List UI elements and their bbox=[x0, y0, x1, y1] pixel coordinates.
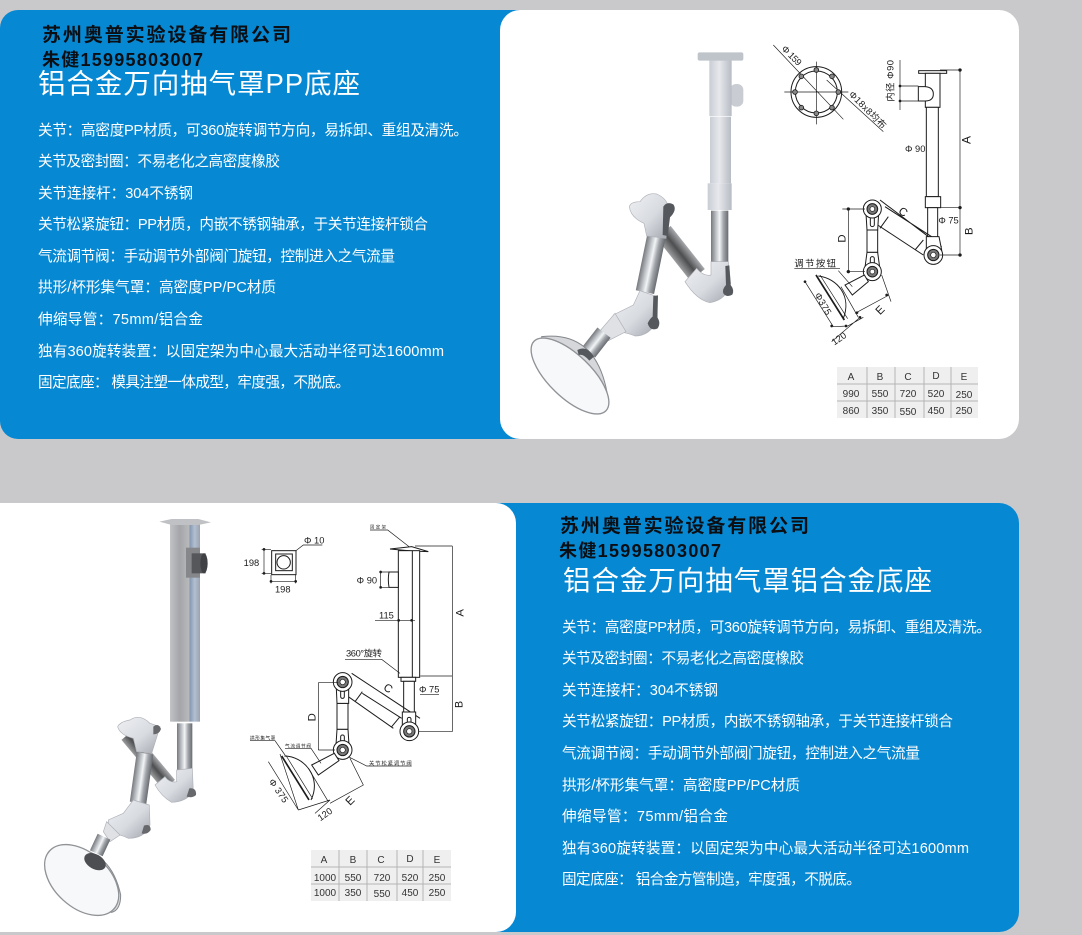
feature list: 伸缩导管：75mm/铝合金 bbox=[562, 808, 728, 825]
dimension table: aluminium base: 250 bbox=[429, 888, 446, 899]
feature list: 关节：高密度PP材质，可360旋转调节方向，易拆卸、重组及清洗。 bbox=[38, 122, 468, 139]
top text block bbox=[38, 23, 468, 391]
dimension lines bbox=[250, 530, 452, 813]
dimension table: aluminium base: 350 bbox=[345, 888, 362, 899]
base plate plan view: 198 bbox=[244, 558, 259, 568]
dimension lines bbox=[804, 60, 962, 342]
dimension table: PP base: 450 bbox=[928, 406, 945, 417]
base plate plan view: Φ 10 bbox=[304, 535, 324, 545]
dimension labels: 气流调节阀 bbox=[285, 742, 311, 749]
feature list: 关节及密封圈：不易老化之高密度橡胶 bbox=[38, 153, 280, 170]
dimension table: aluminium base: 1000 bbox=[314, 888, 337, 899]
dimension table: PP base: 990 bbox=[843, 389, 860, 400]
arm elevation bbox=[282, 547, 428, 800]
dimension table: aluminium base: 1000 bbox=[314, 873, 337, 884]
dimension labels: 调节按钮 bbox=[794, 257, 836, 268]
dimension table: PP base: 550 bbox=[872, 389, 889, 400]
feature list: 关节松紧旋钮：PP材质，内嵌不锈钢轴承，于关节连接杆锁合 bbox=[562, 713, 953, 730]
dimension labels: 固定架 bbox=[370, 524, 387, 531]
bottom text block bbox=[559, 514, 991, 888]
dimension table: PP base: E bbox=[961, 372, 968, 383]
feature list: 关节及密封圈：不易老化之高密度橡胶 bbox=[562, 650, 804, 667]
dimension labels bbox=[250, 524, 467, 823]
product image: extraction arm with PP base bbox=[519, 52, 743, 426]
contact: 朱健15995803007 bbox=[559, 541, 721, 561]
feature list: 伸缩导管：75mm/铝合金 bbox=[38, 311, 203, 328]
dimension labels: 关节松紧调节阀 bbox=[369, 759, 412, 767]
dimension table: aluminium base: C bbox=[377, 855, 385, 866]
dimension table: aluminium base: 520 bbox=[402, 873, 419, 884]
dimension labels: Φ 375 bbox=[267, 777, 290, 805]
dimension table: PP base: B bbox=[877, 372, 884, 383]
panel: bottom white product area bbox=[0, 503, 516, 932]
dimension table: PP base: 520 bbox=[928, 389, 945, 400]
dimension labels: Φ 75 bbox=[419, 684, 439, 694]
dimension table: aluminium base: D bbox=[406, 854, 414, 865]
technical drawing: PP base arm bbox=[773, 44, 975, 347]
dimension table: aluminium base: 550 bbox=[374, 889, 391, 900]
feature list bbox=[562, 619, 991, 888]
dimension labels: D bbox=[836, 234, 848, 243]
feature list: 关节连接杆：304不锈钢 bbox=[562, 682, 718, 699]
feature list: 拱形/杯形集气罩：高密度PP/PC材质 bbox=[562, 777, 800, 794]
feature list bbox=[38, 122, 468, 391]
dimension labels: Φ 90 bbox=[357, 575, 377, 585]
feature list: 气流调节阀：手动调节外部阀门旋钮，控制进入之气流量 bbox=[38, 248, 395, 265]
flange plan view: Φ18x8均布 bbox=[847, 89, 889, 131]
panel: top blue background bbox=[0, 10, 640, 439]
dimension labels: D bbox=[306, 713, 318, 721]
dimension table: aluminium base bbox=[311, 850, 451, 901]
dimension table: aluminium base: A bbox=[321, 855, 328, 866]
product image: extraction arm with aluminium base bbox=[31, 519, 211, 929]
dimension table: PP base: 350 bbox=[872, 406, 889, 417]
feature list: 关节松紧旋钮：PP材质，内嵌不锈钢轴承，于关节连接杆锁合 bbox=[38, 216, 428, 233]
dimension labels: A bbox=[959, 136, 973, 144]
dimension labels: A bbox=[455, 609, 467, 617]
dimension labels: E bbox=[874, 303, 888, 317]
feature list: 固定底座： 模具注塑一体成型，牢度强，不脱底。 bbox=[38, 374, 350, 391]
arm elevation bbox=[816, 71, 947, 320]
dimension labels: E bbox=[344, 794, 358, 808]
feature list: 关节：高密度PP材质，可360旋转调节方向，易拆卸、重组及清洗。 bbox=[562, 619, 991, 636]
dimension labels: 360°旋转 bbox=[346, 647, 382, 658]
dimension labels: Φ375 bbox=[813, 291, 833, 317]
company name: 苏州奥普实验设备有限公司 bbox=[42, 23, 291, 46]
dimension labels: 115 bbox=[379, 610, 394, 620]
dimension table: aluminium base: 250 bbox=[429, 873, 446, 884]
dimension table: aluminium base: B bbox=[350, 855, 357, 866]
feature list: 气流调节阀：手动调节外部阀门旋钮，控制进入之气流量 bbox=[562, 745, 920, 762]
dimension labels: 120 bbox=[830, 330, 848, 347]
dimension labels: Φ 90 bbox=[905, 144, 925, 154]
dimension table: aluminium base: E bbox=[434, 855, 441, 866]
panel: bottom blue background bbox=[400, 503, 1019, 932]
dimension labels: 内径 Φ90 bbox=[885, 60, 896, 102]
dimension table: PP base: 860 bbox=[843, 406, 860, 417]
feature list: 拱形/杯形集气罩：高密度PP/PC材质 bbox=[38, 279, 276, 296]
title: 铝合金万向抽气罩铝合金底座 bbox=[563, 565, 932, 596]
dimension table: PP base: 250 bbox=[956, 390, 973, 401]
panel: top white product area bbox=[500, 10, 1019, 439]
company name: 苏州奥普实验设备有限公司 bbox=[560, 514, 809, 537]
dimension table: aluminium base: 450 bbox=[402, 888, 419, 899]
dimension table: PP base: 550 bbox=[900, 407, 917, 418]
dimension labels bbox=[794, 60, 975, 347]
dimension labels: 120 bbox=[316, 806, 334, 823]
base plate plan view bbox=[244, 535, 324, 595]
dimension labels: C bbox=[896, 205, 910, 220]
dimension labels: B bbox=[963, 227, 975, 235]
dimension table: PP base: A bbox=[848, 372, 855, 383]
feature list: 关节连接杆：304不锈钢 bbox=[38, 185, 193, 202]
feature list: 固定底座： 铝合金方管制造，牢度强，不脱底。 bbox=[562, 871, 861, 888]
dimension table: PP base: C bbox=[904, 372, 912, 383]
dimension labels: B bbox=[454, 701, 466, 708]
feature list: 独有360旋转装置：以固定架为中心最大活动半径可达1600mm bbox=[562, 840, 969, 857]
dimension table: PP base bbox=[837, 367, 978, 418]
flange plan view: Φ 159 bbox=[780, 44, 804, 68]
feature list: 独有360旋转装置：以固定架为中心最大活动半径可达1600mm bbox=[38, 343, 444, 360]
technical drawing: aluminium base arm bbox=[244, 524, 467, 823]
base plate plan view: 198 bbox=[275, 585, 291, 595]
dimension labels: 拱形集气罩 bbox=[250, 734, 276, 741]
dimension labels: C bbox=[381, 682, 395, 696]
contact: 朱健15995803007 bbox=[42, 50, 203, 70]
dimension table: PP base: D bbox=[932, 371, 940, 382]
title: 铝合金万向抽气罩PP底座 bbox=[38, 68, 360, 99]
dimension table: PP base: 250 bbox=[956, 406, 973, 417]
dimension table: PP base: 720 bbox=[900, 389, 917, 400]
dimension table: aluminium base: 720 bbox=[374, 873, 391, 884]
dimension table: aluminium base: 550 bbox=[345, 873, 362, 884]
flange plan view bbox=[773, 44, 889, 132]
dimension labels: Φ 75 bbox=[938, 216, 959, 226]
